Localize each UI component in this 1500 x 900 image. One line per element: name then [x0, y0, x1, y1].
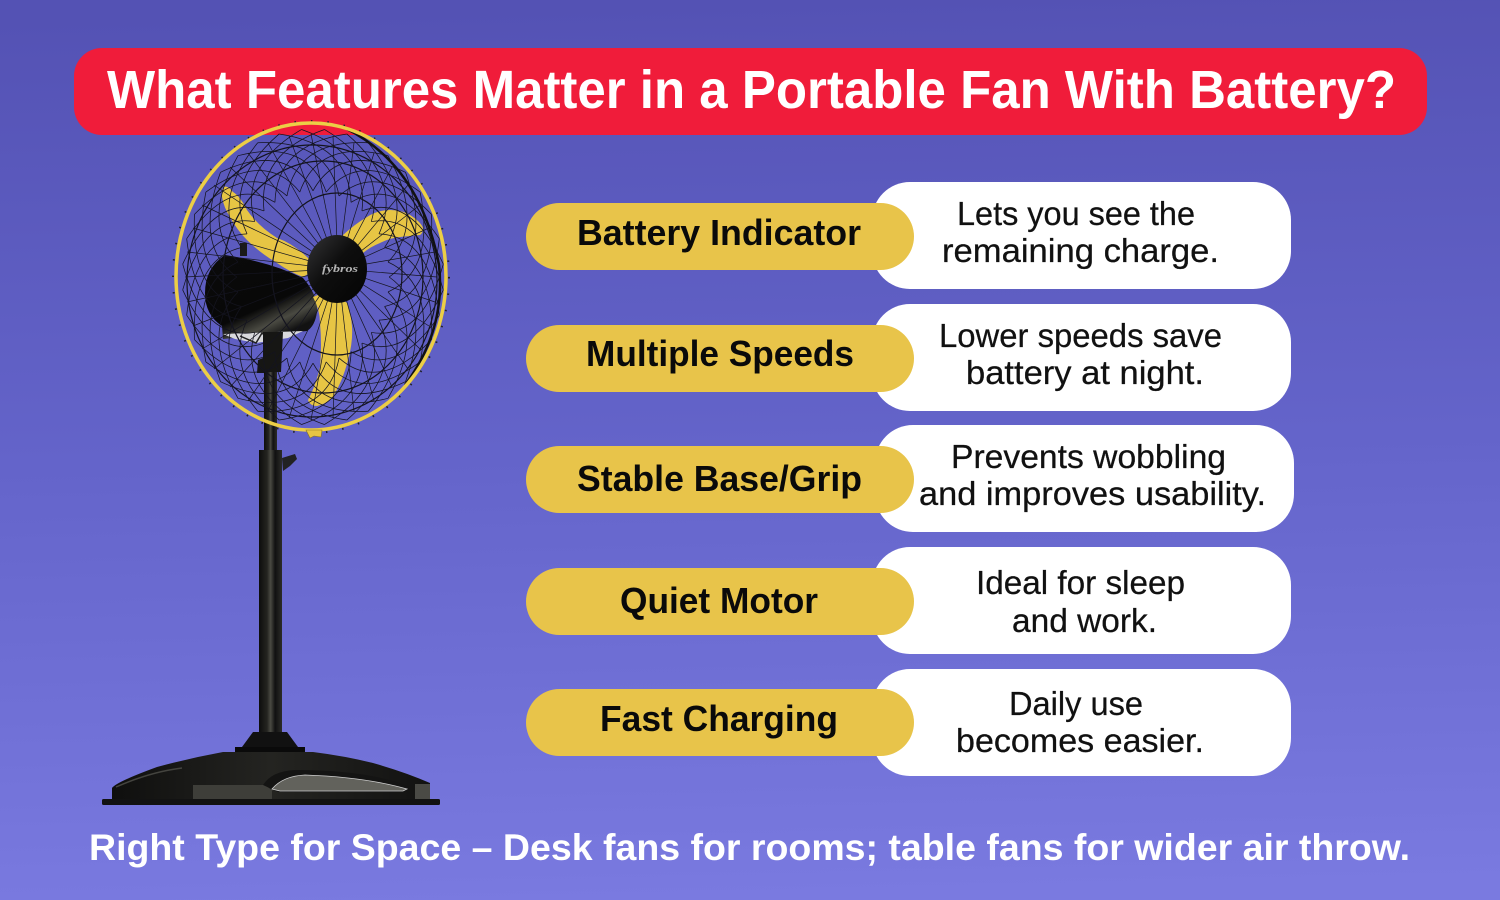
label: multiple speeds	[526, 325, 914, 392]
feature row: stable base	[526, 425, 1294, 532]
feature row: battery indicator	[526, 182, 1291, 289]
hub logo: fybros	[322, 263, 358, 275]
description: fast charging	[872, 669, 1291, 776]
fan illustration	[102, 120, 451, 805]
fan guard rim	[173, 121, 449, 438]
description: multiple speeds: battery at night.	[966, 354, 1204, 391]
label: quiet motor	[526, 568, 914, 635]
label: stable base	[526, 446, 914, 513]
fan guard wire mesh	[175, 120, 451, 434]
description: fast charging: Daily use	[1009, 685, 1143, 722]
fan motor	[205, 243, 317, 343]
fan neck joint	[257, 332, 283, 373]
description: stable base	[875, 425, 1294, 532]
fan stand pole	[259, 330, 297, 734]
description: multiple speeds: Lower speeds save	[939, 317, 1222, 354]
description: battery indicator: Lets you see the	[957, 195, 1195, 232]
feature row: multiple speeds	[526, 304, 1291, 411]
description: multiple speeds	[872, 304, 1291, 411]
title: What Features Matter in a Portable Fan With Battery?	[107, 60, 1396, 120]
label: stable base: Stable Base/Grip	[577, 458, 862, 499]
label: quiet motor: Quiet Motor	[620, 580, 818, 621]
fan hub	[307, 235, 367, 303]
description: stable base: and improves usability.	[919, 475, 1266, 512]
label: battery indicator	[526, 203, 914, 270]
label: fast charging: Fast Charging	[600, 698, 838, 739]
label: multiple speeds: Multiple Speeds	[586, 333, 854, 374]
description: fast charging: becomes easier.	[956, 722, 1204, 759]
footer note: Right Type for Space – Desk fans for rooms; table fans for wider air throw.	[89, 827, 1410, 868]
feature row: quiet motor	[526, 547, 1291, 654]
description: battery indicator: remaining charge.	[942, 232, 1219, 269]
description: quiet motor	[872, 547, 1291, 654]
title banner	[74, 48, 1427, 135]
label: battery indicator: Battery Indicator	[577, 212, 861, 253]
fan base	[102, 732, 440, 805]
description: quiet motor: and work.	[1012, 602, 1157, 639]
description: battery indicator	[872, 182, 1291, 289]
fan blades	[222, 187, 423, 406]
feature row: fast charging	[526, 669, 1291, 776]
description: stable base: Prevents wobbling	[951, 438, 1226, 475]
description: quiet motor: Ideal for sleep	[976, 564, 1185, 601]
label: fast charging	[526, 689, 914, 756]
